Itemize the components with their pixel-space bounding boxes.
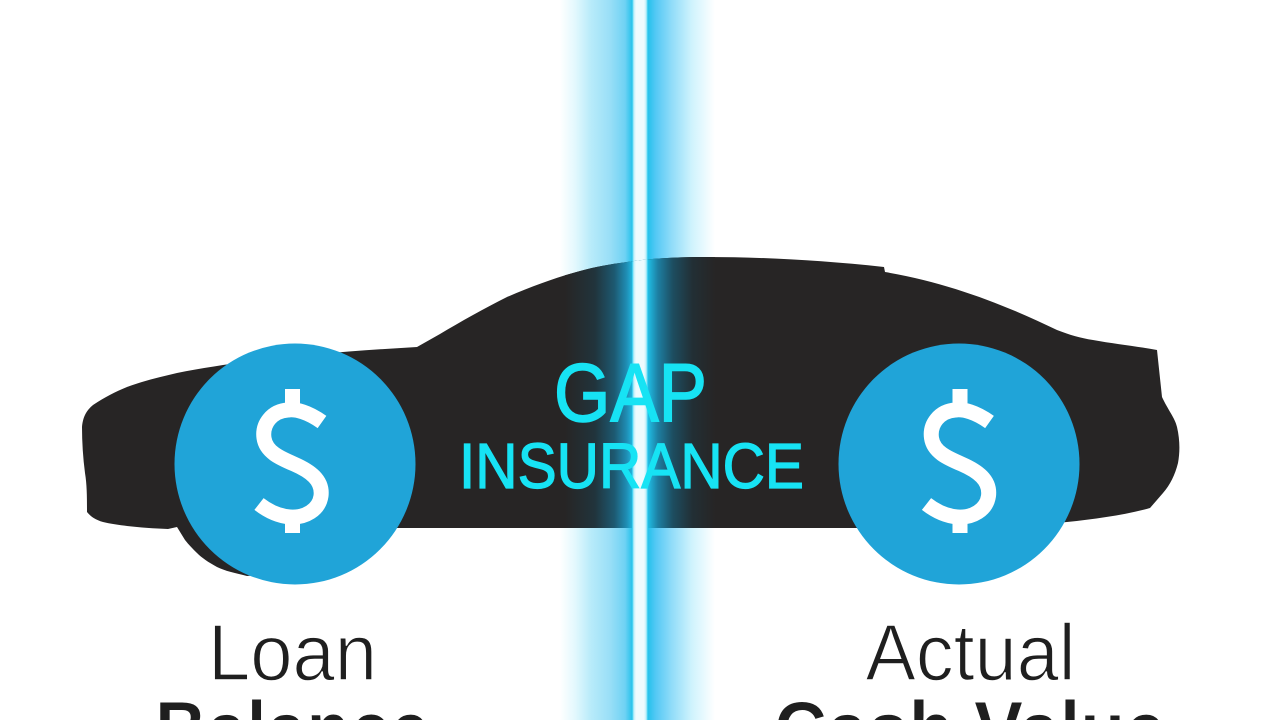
label: actual cash value bbox=[774, 608, 1166, 720]
label: loan balance: Loan bbox=[208, 608, 377, 697]
label: actual cash value: Actual bbox=[866, 608, 1076, 697]
label: loan balance bbox=[155, 608, 430, 720]
glowing divider beam bbox=[560, 0, 715, 720]
car silhouette bbox=[82, 250, 1179, 576]
title: GAP INSURANCE: INSURANCE bbox=[459, 430, 804, 502]
title: GAP INSURANCE: GAP bbox=[554, 346, 707, 439]
title: GAP INSURANCE bbox=[459, 346, 804, 502]
icon: actual cash value dollar coin bbox=[838, 344, 1080, 584]
icon: loan balance dollar coin bbox=[174, 344, 416, 584]
